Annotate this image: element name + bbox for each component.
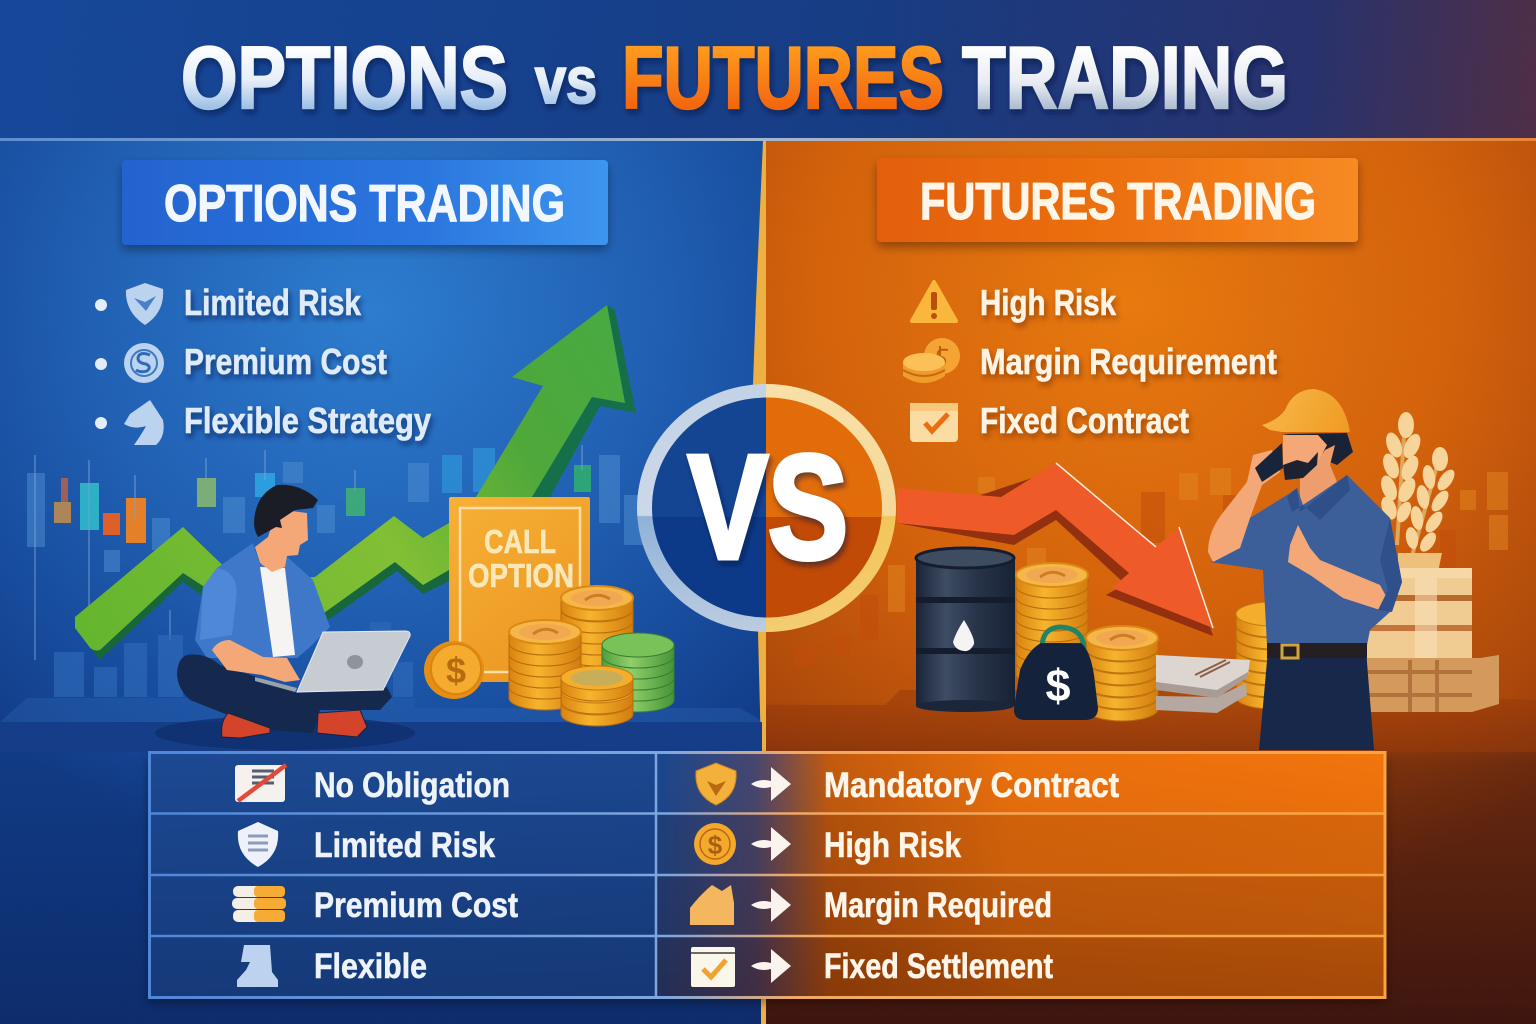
background: futures panel xyxy=(765,140,1536,1024)
arrow xyxy=(751,949,791,983)
call option card: OPTION xyxy=(468,557,574,594)
arrow xyxy=(751,767,791,801)
oil barrel xyxy=(916,548,1015,712)
icon: gold shield xyxy=(696,763,736,805)
stacked papers xyxy=(1156,655,1250,713)
icon: warning triangle xyxy=(912,282,956,321)
icon: chess knight xyxy=(124,400,164,445)
list: futures features xyxy=(903,282,1277,442)
text: premium cost: Premium Cost xyxy=(314,886,518,925)
text: fixed contract: Fixed Contract xyxy=(980,400,1189,441)
futures candlestick backdrop xyxy=(795,468,1508,665)
vs badge: VS xyxy=(688,425,848,590)
icon: dollar coin xyxy=(424,641,484,699)
trousers xyxy=(1259,650,1374,750)
jacket xyxy=(195,543,330,658)
shirt xyxy=(1210,475,1402,645)
text: limited risk: Limited Risk xyxy=(314,826,495,865)
heading: options trading xyxy=(122,160,608,245)
face xyxy=(1283,435,1327,478)
coin stacks: futures xyxy=(1016,563,1308,721)
heading: futures trading xyxy=(877,158,1358,242)
tee xyxy=(260,567,295,657)
icon: margin coins xyxy=(903,338,960,383)
text: margin required: Margin Required xyxy=(824,886,1052,925)
helmet xyxy=(1262,389,1350,432)
arrow: red falling xyxy=(897,463,1213,636)
row: no obligation vs mandatory contract xyxy=(235,763,1119,805)
forearm and thumb xyxy=(1288,525,1387,610)
icon: dollar coin xyxy=(694,823,736,865)
coin stacks: options xyxy=(509,586,674,726)
shoes xyxy=(222,713,270,738)
arm xyxy=(212,640,300,682)
list: options features xyxy=(95,282,431,445)
neck xyxy=(1300,445,1337,510)
text: no obligation: No Obligation xyxy=(314,766,510,805)
belt xyxy=(1267,643,1367,658)
heading: futures trading: FUTURES TRADING xyxy=(920,173,1316,231)
laptop xyxy=(255,677,297,692)
text: fixed settlement: Fixed Settlement xyxy=(824,947,1053,986)
icon: shield xyxy=(126,283,163,325)
row: flexible vs fixed settlement xyxy=(237,945,1053,987)
money bag: $ xyxy=(1045,660,1071,711)
text: premium cost: Premium Cost xyxy=(184,341,387,382)
row: limited risk vs high risk xyxy=(238,822,961,867)
illustration: futures trader xyxy=(1208,389,1402,750)
title xyxy=(181,28,1288,127)
title: FUTURES xyxy=(622,28,944,127)
options candlestick backdrop xyxy=(27,445,643,697)
title: OPTIONS xyxy=(181,28,508,127)
money bag xyxy=(1014,627,1098,720)
icon: premium coin xyxy=(124,343,164,383)
hair xyxy=(254,485,318,537)
neck and face xyxy=(255,510,308,572)
icon: chess piece xyxy=(237,945,278,987)
arrow xyxy=(751,827,791,861)
background: options panel xyxy=(0,140,766,1024)
icon: calendar check xyxy=(691,947,735,987)
futures floor xyxy=(766,690,1536,752)
options floor xyxy=(0,698,762,752)
call option card: CALL xyxy=(484,523,556,560)
background: header band xyxy=(0,0,1536,140)
title: vs xyxy=(535,43,597,117)
vs badge xyxy=(637,384,896,632)
beard xyxy=(1283,452,1318,480)
hair xyxy=(1282,433,1353,465)
icon: dollar coin: $ xyxy=(708,830,723,860)
text: flexible strategy: Flexible Strategy xyxy=(184,400,431,441)
arrow: green rising xyxy=(75,305,636,660)
icon: white shield xyxy=(238,822,278,867)
text: high risk: High Risk xyxy=(824,826,961,865)
icon: margin hand xyxy=(690,885,734,925)
collar xyxy=(1287,475,1350,520)
call option card xyxy=(449,497,590,682)
icon: fixed contract xyxy=(910,403,958,442)
sleeve xyxy=(1378,518,1402,612)
raised arm xyxy=(1208,450,1280,562)
comparison table xyxy=(148,752,1386,998)
phone xyxy=(1255,443,1283,482)
illustration: options trader xyxy=(177,485,410,738)
row: premium cost vs margin required xyxy=(232,885,1052,925)
title: TRADING xyxy=(962,28,1288,127)
icon: crossed document xyxy=(235,765,286,802)
icon: dollar coin: $ xyxy=(446,650,466,691)
icon: stacked bars xyxy=(232,886,286,922)
text: high risk: High Risk xyxy=(980,282,1117,323)
legs xyxy=(177,654,392,733)
heading: options trading: OPTIONS TRADING xyxy=(164,175,565,233)
wheat and boxes xyxy=(1367,412,1499,712)
text: limited risk: Limited Risk xyxy=(184,282,362,323)
text: margin requirement: Margin Requirement xyxy=(980,341,1277,382)
arrow xyxy=(751,888,791,922)
text: mandatory contract: Mandatory Contract xyxy=(824,766,1119,805)
text: flexible: Flexible xyxy=(314,947,427,986)
